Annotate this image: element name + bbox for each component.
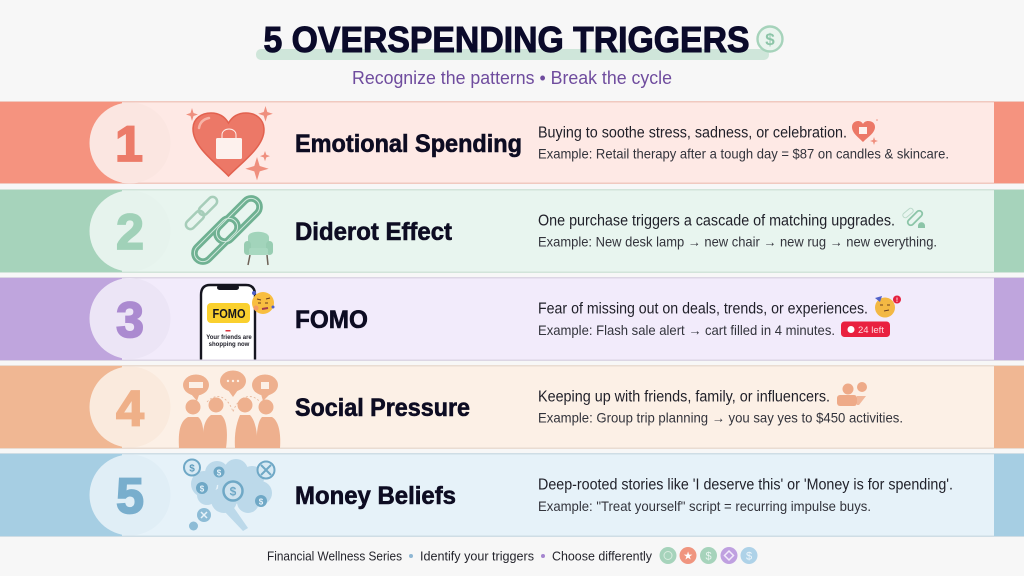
icon: brain with coins: $ (230, 484, 237, 498)
icon: brain with coins: $ (200, 484, 205, 494)
number badge 5: 5 (116, 468, 144, 524)
icon: dollar coin: $ (765, 30, 775, 49)
number badge 4: 4 (116, 380, 144, 436)
number badge 1: 1 (115, 116, 143, 172)
footer icons (660, 547, 758, 564)
heading: FOMO (295, 306, 368, 334)
icon: dollar coin (758, 26, 782, 52)
example: Example: Group trip planning → you say yes to $450 activities. (538, 410, 903, 426)
description: Fear of missing out on deals, trends, or experiences. (538, 300, 868, 318)
icon: small heart (852, 119, 878, 145)
number badge 4 (90, 366, 170, 448)
footer (267, 548, 652, 564)
description: Buying to soothe stress, sadness, or celebration. (538, 124, 847, 142)
icon: heart with shopping bag (186, 106, 273, 180)
description: One purchase triggers a cascade of matching upgrades. (538, 212, 895, 230)
panel: money beliefs (0, 453, 1024, 537)
number badge 5 (90, 454, 170, 536)
footer icons: ★ (683, 550, 693, 562)
icon: chain links and chair (184, 195, 273, 265)
icon: brain with coins: $ (189, 464, 195, 474)
description: Keeping up with friends, family, or influencers. (538, 388, 830, 406)
footer icons: $ (705, 550, 712, 562)
example: Example: New desk lamp → new chair → new rug → new everything. (538, 234, 937, 250)
footer: Choose differently (552, 548, 652, 564)
heading: Diderot Effect (295, 218, 453, 246)
icon: brain with coins: $ (259, 498, 264, 506)
example: Example: Flash sale alert → cart filled in 4 minutes. (538, 323, 835, 338)
panel: emotional spending (0, 101, 1024, 184)
panel: fomo (0, 277, 1024, 361)
number badge 1 (90, 102, 170, 184)
icon: small party face: ! (896, 298, 898, 304)
icon: brain with coins (184, 459, 274, 531)
heading: Social Pressure (295, 394, 470, 422)
example: Example: Retail therapy after a tough day = $87 on candles & skincare. (538, 146, 949, 162)
icon: brain with coins: $ (217, 468, 222, 478)
example: Example: "Treat yourself" script = recurring impulse buys. (538, 499, 871, 514)
title: 5 OVERSPENDING TRIGGERS (264, 19, 750, 60)
number badge 3: 3 (116, 292, 144, 348)
icon: phone with FOMO alert: shopping now (209, 342, 250, 348)
subtitle: Recognize the patterns • Break the cycle (352, 67, 672, 88)
number badge 3 (90, 278, 170, 359)
footer: Financial Wellness Series (267, 548, 402, 564)
number badge 2 (90, 190, 170, 272)
icon: party face (252, 291, 274, 314)
icon: phone with FOMO alert: FOMO (212, 306, 246, 321)
description: Deep-rooted stories like 'I deserve this' or 'Money is for spending'. (538, 476, 953, 494)
badge: 24 left: 24 left (858, 325, 884, 336)
badge: 24 left (841, 322, 890, 337)
icon: small chain (902, 207, 925, 228)
icon: small party face (875, 296, 901, 318)
panel: diderot effect (0, 189, 1024, 273)
heading: Emotional Spending (295, 130, 522, 158)
panel: social pressure (0, 365, 1024, 449)
icon: people talking (179, 370, 280, 448)
heading: Money Beliefs (295, 482, 456, 510)
number badge 2: 2 (116, 204, 144, 260)
icon: phone with FOMO alert (201, 285, 255, 360)
footer: Identify your triggers (420, 548, 534, 564)
icon: phone with FOMO alert: Your friends are (206, 335, 252, 341)
footer icons: $ (746, 550, 752, 562)
icon: small people (837, 382, 867, 406)
